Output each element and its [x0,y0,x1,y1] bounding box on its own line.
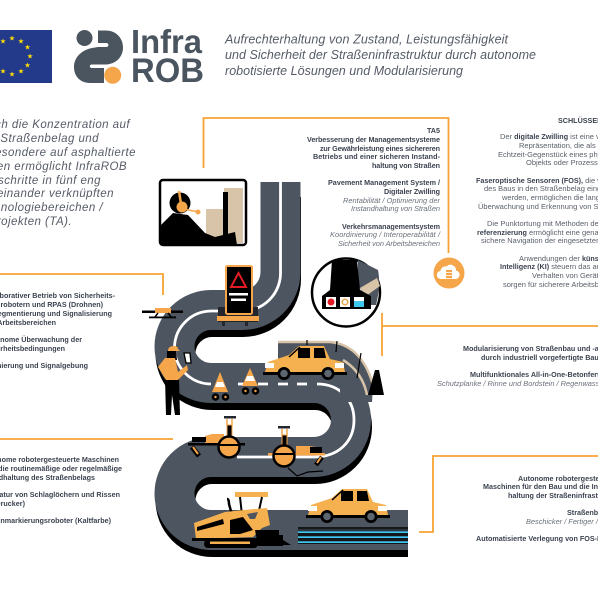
text block: TA5: Digitaler Zwilling [384,187,440,196]
connector: right bottom [419,456,598,532]
text block: TA5: Verbesserung der Managementsysteme [307,135,440,144]
text block: TA5: Pavement Management System / [328,178,440,187]
icon: cones [212,368,259,401]
text block: key technologies [476,116,598,289]
text block: TA5: Instandhaltung von Straßen [351,204,440,213]
icon: drone [142,308,183,318]
icon: operator at monitor [160,180,246,245]
icon: EU flag: ★ [24,44,31,52]
title: robotisierte Lösungen und Modularisierung [225,64,463,78]
icon: yellow car on road [263,346,347,380]
icon: warning sign on trailer [217,266,259,326]
text block: TA5: Rentabilität / Optimierung der [343,196,441,205]
text block: TA5: Betriebs und einer sicheren Instand- [313,152,441,161]
text block: TA5: Verkehrsmanagementsystem [342,222,440,231]
text block: TA5: haltung von Straßen [372,161,440,170]
icon: EU flag: ★ [27,52,33,60]
connector: TA5 frame [204,118,448,253]
text block: TA5: zur Gewährleistung eines sichereren [320,144,440,153]
text block: TA5: Koordinierung / Interoperabilität / [330,230,441,239]
icon: EU flag [0,30,52,83]
title: Aufrechterhaltung von Zustand, Leistungsfähigkeit [224,32,509,46]
connector: right middle [382,313,598,356]
logo: InfraROB: ROB [131,52,204,90]
icon: guard rail [278,340,384,402]
text block: TA5: Sicherheit von Arbeitsbereichen [338,239,440,248]
text block: left top [0,291,116,370]
icon: control panel circle [312,258,380,326]
icon: EU flag: ★ [0,38,6,46]
road markings: blue sensor lines [298,527,408,547]
icon: EU flag: ★ [18,68,24,76]
title [224,32,536,78]
icon: EU flag: ★ [18,38,24,46]
title: und Sicherheit der Straßeninfrastruktur durch autonome [225,48,536,62]
icon: paver [192,492,291,548]
icon: EU flag: ★ [24,62,31,70]
text block: right bottom [476,474,598,543]
icon: worker with tablet [158,346,191,415]
icon: cloud [434,258,464,288]
icon: yellow car on bottom road [306,489,390,523]
text block: TA5 [307,126,441,248]
text block: right middle [437,344,598,388]
connector: left bottom [0,438,173,440]
icon: EU flag: ★ [9,70,15,78]
intro text [0,119,136,228]
icon: EU flag: ★ [9,34,15,42]
icon: roller right [268,426,325,476]
icon: roller left [188,416,245,458]
text block: key technologies: Repräsentation, die als [519,141,596,150]
text block: left bottom [0,455,122,525]
logo: InfraROB: Infra [131,23,203,60]
icon: EU flag: ★ [0,68,6,76]
road [174,182,408,537]
text block: TA5: TA5 [427,126,440,135]
logo: InfraROB [74,23,204,90]
connector: left top [0,274,163,295]
